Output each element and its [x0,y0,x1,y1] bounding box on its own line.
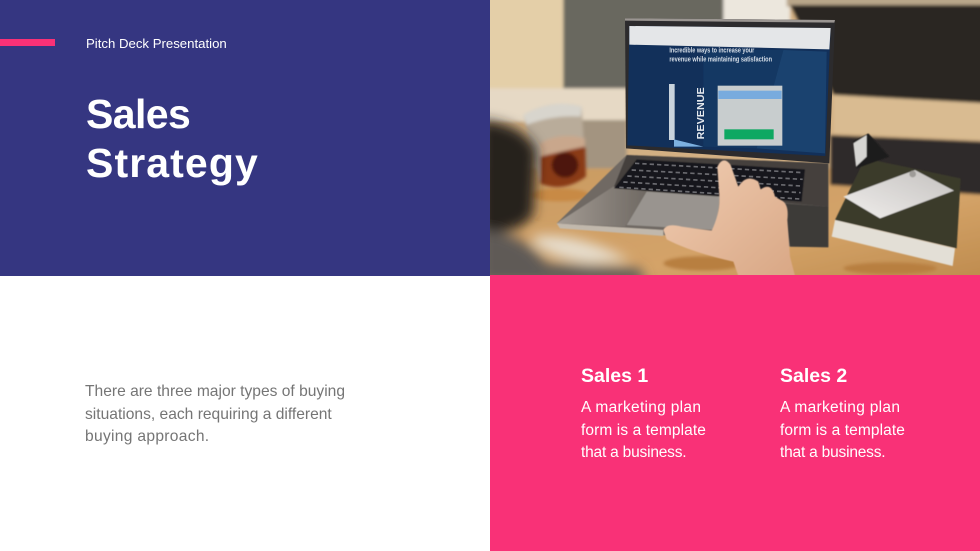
accent bar [0,39,55,46]
laptop screen [625,18,835,163]
text: Sales 2 description [780,399,905,461]
screen text: Incredible ways to increase your [669,46,754,55]
heading: Sales 1: Sales 1 [581,365,648,387]
notebook and phone [832,133,961,266]
hand [663,160,795,276]
text: Sales 1 description: form is a template [581,422,706,438]
panel: intro text [85,383,345,445]
panel: intro text: There are three major types of buying [85,383,345,400]
panel: intro text: situations, each requiring a different [85,406,332,422]
laptop screen: revenue while maintaining satisfaction [669,55,772,64]
text: Sales 2 description: form is a template [780,422,905,438]
panel: navy header [0,0,490,276]
laptop screen: REVENUE [696,87,707,139]
panel: intro text: buying approach. [85,428,209,445]
laptop base [557,155,828,247]
keyboard keys [619,163,803,199]
title: Strategy [86,140,259,186]
photo: laptop on a wooden desk [490,0,980,275]
background wall and desk [483,0,980,283]
blurred shoulder in foreground [480,120,647,283]
heading: Sales 2: Sales 2 [780,365,847,387]
text: Sales 1 description [581,399,706,461]
text: Sales 2 description: that a business. [780,444,885,461]
panel: pink sales [490,275,980,551]
jar of tea [523,104,586,187]
text: Sales 1 description: that a business. [581,444,686,461]
title: Sales [86,91,190,137]
title [86,91,259,186]
text: Sales 1 description: A marketing plan [581,399,701,416]
text: Sales 2 description: A marketing plan [780,399,900,416]
subtitle: Pitch Deck Presentation [86,36,227,51]
